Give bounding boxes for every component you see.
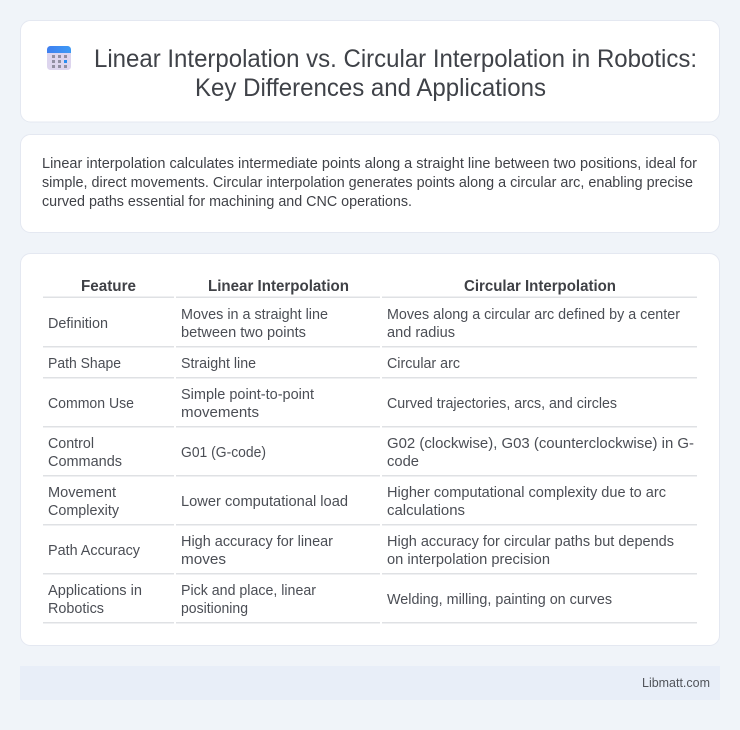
text block: introduction: simple, direct movements. Circular interpolation generates points along a circular arc, enabling precise [42, 175, 693, 191]
row: Path Shape: Path Shape [48, 356, 121, 372]
table header: Linear Interpolation [208, 278, 349, 295]
row: Applications in Robotics [43, 583, 697, 624]
row: Control Commands: code [387, 454, 419, 470]
row: Common Use: Curved trajectories, arcs, and circles [387, 396, 617, 412]
row: Movement Complexity: Movement [48, 485, 116, 501]
title [94, 46, 697, 102]
row: Movement Complexity [43, 485, 697, 526]
row: Movement Complexity: Complexity [48, 503, 120, 519]
row: Path Accuracy: High accuracy for linear [181, 534, 333, 550]
text block: introduction: curved paths essential for machining and CNC operations. [42, 194, 412, 210]
row: Applications in Robotics: Welding, milling, painting on curves [387, 592, 612, 608]
footer [20, 666, 720, 700]
table header: Feature [81, 278, 136, 295]
text block: introduction: Linear interpolation calculates intermediate points along a straight line between two positions, ideal for [42, 156, 697, 172]
row: Control Commands [43, 436, 697, 476]
row: Applications in Robotics: Applications in [48, 583, 142, 599]
row: Control Commands: G02 (clockwise), G03 (counterclockwise) in G- [387, 436, 694, 452]
row: Control Commands: G01 (G-code) [181, 445, 266, 461]
row: Path Accuracy: Path Accuracy [48, 543, 141, 559]
row: Path Accuracy: moves [181, 552, 226, 568]
table header [43, 278, 697, 298]
row: Path Shape: Straight line [181, 356, 256, 372]
row: Movement Complexity: Lower computational load [181, 494, 348, 510]
row: Common Use: Simple point-to-point [181, 387, 314, 403]
icon: calendar grid [47, 46, 71, 70]
row: Common Use: Common Use [48, 396, 134, 412]
row: Definition: Moves in a straight line [181, 307, 328, 323]
row: Path Shape: Circular arc [387, 356, 460, 372]
footer credit: Libmatt.com [642, 676, 710, 690]
title: Linear Interpolation vs. Circular Interpolation in Robotics: [94, 46, 697, 73]
row: Path Shape [43, 356, 697, 378]
row: Control Commands: Control [48, 436, 94, 452]
row: Movement Complexity: calculations [387, 503, 465, 519]
row: Movement Complexity: Higher computational complexity due to arc [387, 485, 666, 501]
panel: header [20, 20, 720, 122]
row: Definition: and radius [387, 325, 455, 341]
row: Applications in Robotics: Pick and place, linear [181, 583, 316, 599]
panel: comparison table [20, 254, 720, 646]
row: Common Use [43, 387, 697, 428]
panel: introduction [20, 134, 720, 232]
row: Applications in Robotics: Robotics [48, 601, 104, 617]
table header: Circular Interpolation [464, 278, 616, 295]
row: Applications in Robotics: positioning [181, 601, 248, 617]
title: Key Differences and Applications [195, 75, 546, 102]
row: Definition: between two points [181, 325, 306, 341]
row: Definition: Moves along a circular arc defined by a center [387, 307, 680, 323]
row: Path Accuracy: on interpolation precision [387, 552, 550, 568]
row: Definition: Definition [48, 316, 108, 332]
row: Path Accuracy: High accuracy for circular paths but depends [387, 534, 674, 550]
row: Common Use: movements [181, 405, 259, 421]
text block: introduction [42, 156, 697, 210]
row: Control Commands: Commands [48, 454, 122, 470]
row: Path Accuracy [43, 534, 697, 574]
row: Definition [43, 307, 697, 348]
